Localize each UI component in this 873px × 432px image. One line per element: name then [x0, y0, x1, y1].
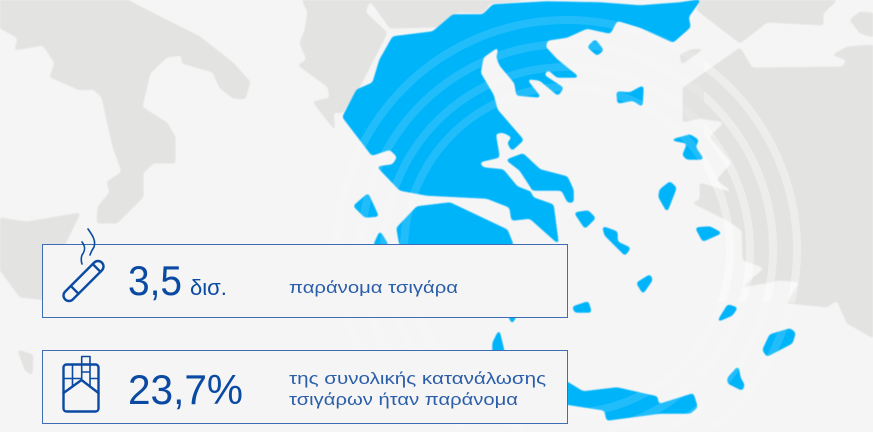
Bulgaria and Turkey north	[697, 0, 837, 43]
panel: illegal cigarettes	[42, 229, 568, 318]
icon: cigarette	[61, 229, 106, 303]
Lemnos	[617, 86, 643, 106]
Skyros	[575, 211, 595, 228]
concentric signal rings	[337, 20, 797, 428]
Karpathos	[728, 367, 744, 390]
Albania	[298, 0, 387, 130]
Naxos	[637, 275, 652, 293]
Antikythira	[493, 331, 504, 352]
icon: cigarette pack	[64, 356, 98, 412]
Rhodes	[763, 329, 795, 356]
Milos	[573, 302, 591, 312]
Ionian island 1	[354, 194, 378, 217]
Kos	[718, 305, 737, 321]
Gulf of Corinth south	[397, 203, 513, 245]
Thrace sliver	[680, 49, 703, 64]
Italy	[0, 0, 250, 223]
Kythira	[508, 314, 517, 323]
panel: share of consumption	[42, 350, 568, 424]
Sicily	[0, 213, 80, 300]
mainland coast	[343, 0, 700, 243]
Andros and Tinos	[603, 227, 630, 255]
value: 3,5 billion: 3,5	[128, 257, 182, 304]
Black Sea islet	[850, 12, 873, 37]
Samos	[696, 227, 721, 241]
Thasos	[588, 40, 603, 55]
small island	[18, 350, 33, 375]
Balkans north	[370, 0, 547, 28]
label: παράνομα τσιγάρα	[289, 278, 458, 297]
label: της συνολικής κατανάλωσης	[289, 369, 546, 388]
value: 23,7%: 23,7%	[128, 366, 243, 413]
label: τσιγάρων ήταν παράνομα	[289, 390, 518, 409]
unit: δισ.	[190, 275, 227, 300]
Crete	[560, 378, 697, 420]
Ionian island 2	[374, 232, 388, 245]
Chios	[659, 182, 676, 211]
Lesbos	[672, 135, 703, 159]
Evia gulf	[507, 154, 573, 202]
Turkey	[683, 45, 873, 338]
map: Greece seas	[343, 0, 795, 420]
